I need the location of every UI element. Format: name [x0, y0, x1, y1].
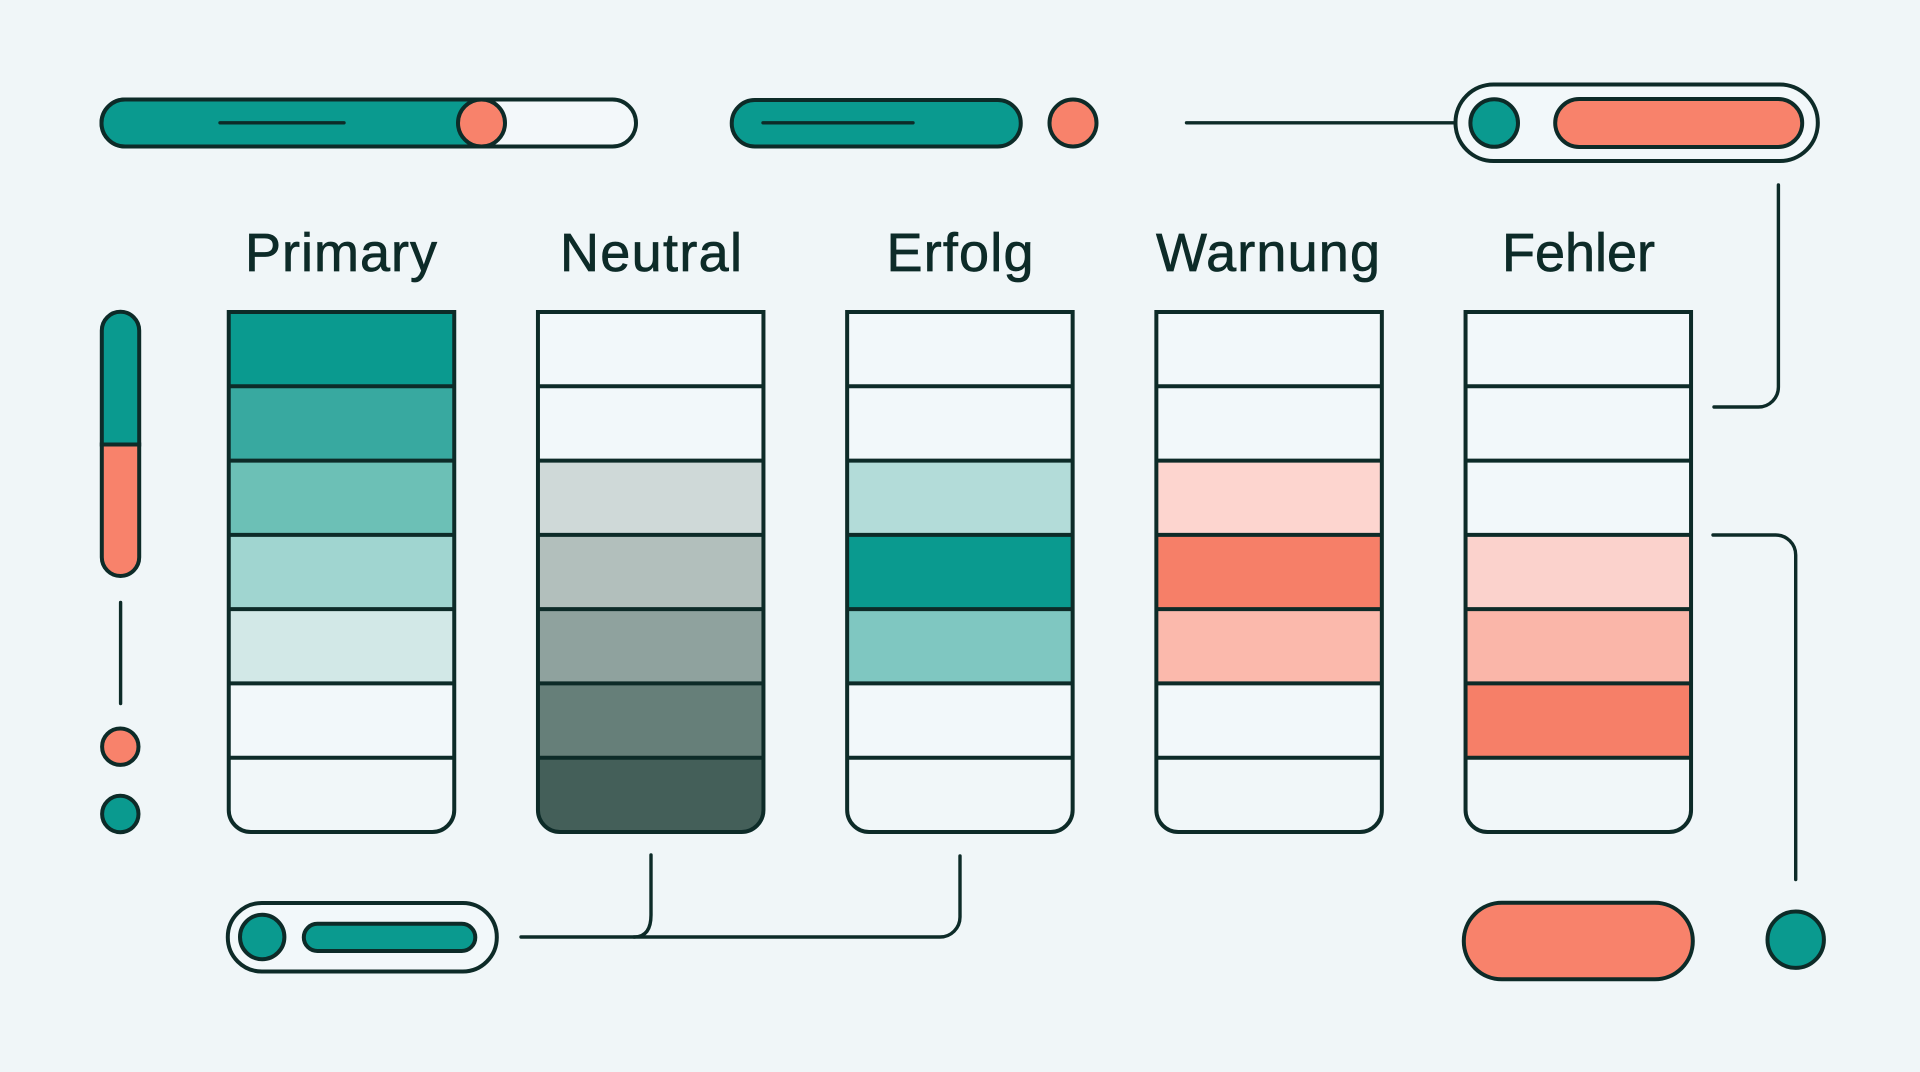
swatch column: Primary: [229, 312, 454, 832]
coral pill: bottom right: [1464, 903, 1693, 979]
pill with line and dot: top centre: [732, 100, 1096, 146]
swatch column: Erfolg: [847, 312, 1073, 832]
swatch column: Warnung: [1156, 312, 1382, 832]
connector: bottom chip to Neutral and Erfolg columns: [521, 855, 960, 937]
connector: top chip to Fehler column: [1714, 185, 1778, 407]
swatch column: Fehler: [1466, 312, 1691, 832]
vertical pill: left: [102, 312, 139, 576]
heading: Primary: Primary: [245, 223, 437, 283]
connector: Fehler column to teal dot: [1713, 535, 1796, 880]
slider: top left: [102, 100, 636, 146]
dot: teal: [102, 796, 138, 832]
connector with toggle chip: top right: [1186, 84, 1818, 161]
heading: Fehler: Fehler: [1502, 223, 1655, 283]
toggle chip: bottom left: [228, 903, 497, 972]
heading: Warnung: Warnung: [1156, 223, 1380, 283]
dot: coral: [102, 728, 138, 765]
heading: Erfolg: Erfolg: [886, 223, 1034, 283]
heading: Neutral: Neutral: [560, 223, 742, 283]
swatch column: Neutral: [538, 312, 763, 832]
vertical line: left: [119, 602, 122, 704]
teal dot: bottom right: [1768, 912, 1824, 968]
